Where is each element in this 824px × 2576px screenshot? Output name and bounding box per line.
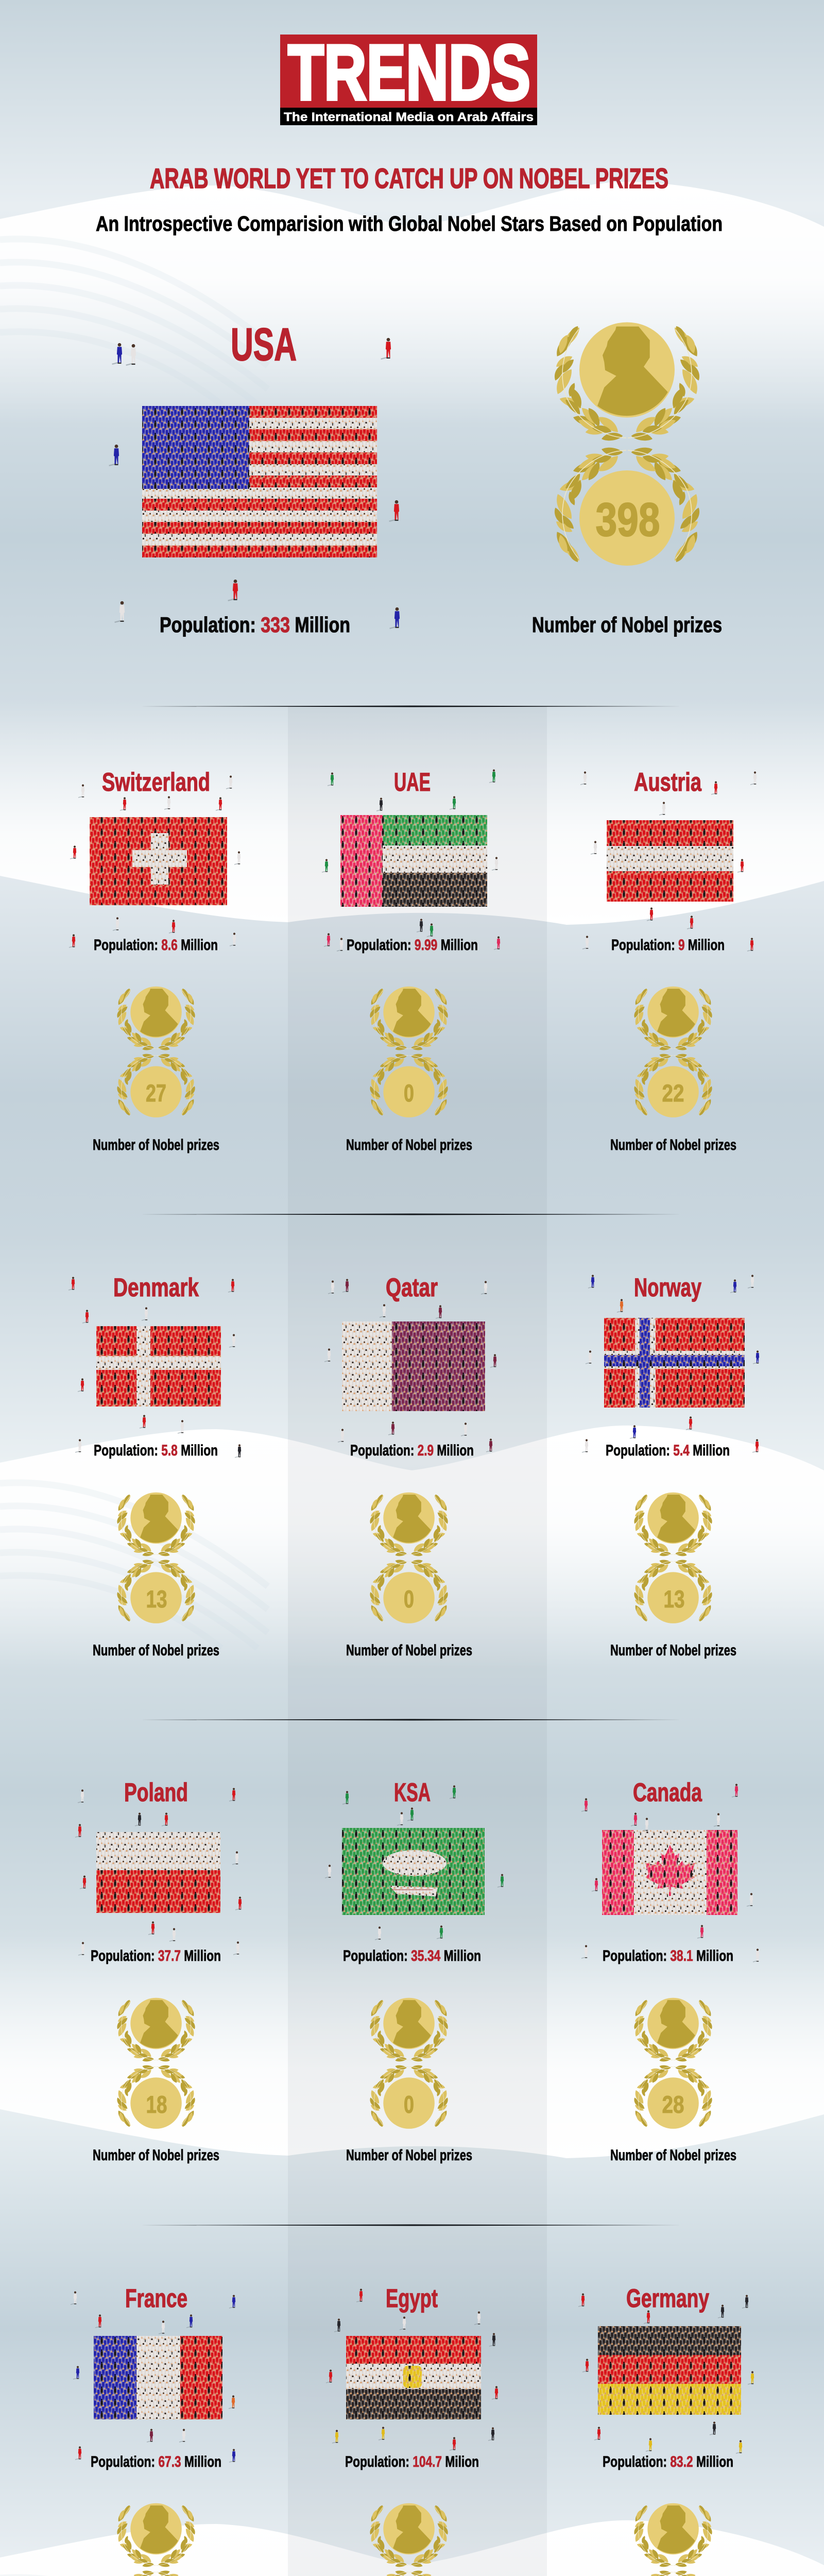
label: Number of Nobel prizes	[93, 1137, 219, 1154]
panel: Austria	[580, 768, 757, 1154]
population: Population: 9 Million	[611, 937, 725, 954]
medal	[632, 1493, 714, 1623]
heading: Canada	[633, 1778, 702, 1807]
panel: Egypt	[326, 2284, 498, 2576]
heading: USA: USA	[231, 318, 297, 370]
heading: Norway	[634, 1273, 701, 1302]
crowd flag	[96, 1326, 221, 1406]
logo: TRENDS: TRENDS	[288, 29, 530, 116]
population: USA: Population: 333 Million	[160, 613, 350, 637]
people	[68, 1277, 241, 1458]
medal	[632, 987, 714, 1117]
people	[75, 1788, 242, 1955]
crowd flag	[94, 2336, 222, 2419]
people	[69, 775, 241, 947]
heading: Poland	[124, 1778, 188, 1807]
label: Number of Nobel prizes	[93, 2147, 219, 2164]
population: Population: 9.99 Million	[347, 937, 478, 954]
crowd flag	[604, 1318, 745, 1408]
panel: France	[71, 2284, 235, 2576]
heading: France	[125, 2284, 187, 2313]
crowd flag: USA	[142, 406, 377, 557]
medal	[368, 1493, 450, 1623]
medal	[115, 987, 197, 1117]
heading: Egypt	[386, 2284, 438, 2313]
panel: UAE	[322, 768, 500, 1154]
crowd flag	[598, 2326, 741, 2415]
population: Population: 35.34 Million	[343, 1947, 481, 1964]
people	[326, 2289, 498, 2450]
panel: Canada	[581, 1778, 759, 2164]
population: Population: 8.6 Million	[94, 937, 218, 954]
panel: Switzerland	[69, 768, 241, 1154]
label: Number of Nobel prizes	[346, 1642, 472, 1659]
panel: USA	[109, 318, 722, 637]
panel: Qatar	[324, 1273, 496, 1659]
medal: 0	[404, 1585, 414, 1613]
label: Number of Nobel prizes	[346, 1137, 472, 1154]
people	[322, 769, 500, 951]
crowd flag	[346, 2336, 481, 2419]
population: Population: 5.8 Million	[94, 1442, 218, 1459]
crowd flag	[342, 1321, 485, 1411]
people	[324, 1279, 496, 1452]
people	[325, 1785, 504, 1940]
label: Number of Nobel prizes	[93, 1642, 219, 1659]
panel: KSA	[325, 1778, 504, 2164]
crowd flag	[602, 1830, 737, 1915]
crowd flag	[90, 817, 227, 905]
medal	[368, 2503, 450, 2576]
heading: Germany	[626, 2284, 709, 2313]
panel: Germany	[578, 2284, 754, 2576]
center column band	[288, 706, 547, 2576]
medal: 28	[662, 2091, 684, 2118]
medal	[115, 1998, 197, 2129]
heading: KSA	[394, 1778, 431, 1807]
people	[578, 2293, 754, 2453]
medal: 0	[404, 1079, 414, 1107]
medal: 0	[404, 2091, 414, 2118]
medal: USA 398	[552, 323, 702, 566]
heading: Switzerland	[102, 768, 210, 796]
crowd flag	[342, 1828, 485, 1915]
crowd flag	[607, 820, 733, 902]
medal: 22	[662, 1079, 684, 1107]
heading: Austria	[634, 768, 702, 796]
medal	[115, 2503, 197, 2576]
crowd flag	[340, 815, 487, 907]
medal	[115, 1493, 197, 1623]
medal	[368, 987, 450, 1117]
population: Population: 37.7 Million	[91, 1947, 221, 1964]
population: Population: 67.3 Million	[91, 2453, 221, 2470]
people	[580, 771, 757, 951]
label: number of prizes USA: Number of Nobel prizes	[532, 613, 722, 637]
panel: Denmark	[68, 1273, 241, 1659]
population: Population: 38.1 Million	[603, 1947, 733, 1964]
label: Number of Nobel prizes	[610, 1642, 736, 1659]
medal: 18	[146, 2091, 167, 2118]
medal: USA 398: 398	[595, 494, 660, 546]
heading: Qatar	[386, 1273, 438, 1302]
population: Population: 2.9 Million	[350, 1442, 474, 1459]
medal	[632, 2503, 714, 2576]
medal: 27	[146, 1079, 166, 1107]
medal	[368, 1998, 450, 2129]
population: Population: 104.7 Milion	[345, 2453, 479, 2470]
label: Number of Nobel prizes	[610, 1137, 736, 1154]
medal	[632, 1998, 714, 2129]
label: Number of Nobel prizes	[346, 2147, 472, 2164]
panel: Norway	[582, 1273, 759, 1659]
heading: Denmark	[113, 1273, 199, 1302]
scattered people: USA	[109, 338, 400, 629]
logo: TRENDS: The International Media on Arab Affairs	[284, 110, 534, 124]
medal: 13	[663, 1585, 685, 1613]
population: Population: 83.2 Million	[603, 2453, 733, 2470]
people	[71, 2291, 235, 2462]
medal: 13	[146, 1585, 167, 1613]
panel: Poland	[75, 1778, 242, 2164]
people	[581, 1784, 759, 1962]
population: Population: 5.4 Million	[606, 1442, 730, 1459]
label: Number of Nobel prizes	[610, 2147, 736, 2164]
people	[582, 1275, 759, 1452]
heading: UAE	[394, 768, 431, 796]
crowd flag	[96, 1832, 220, 1913]
